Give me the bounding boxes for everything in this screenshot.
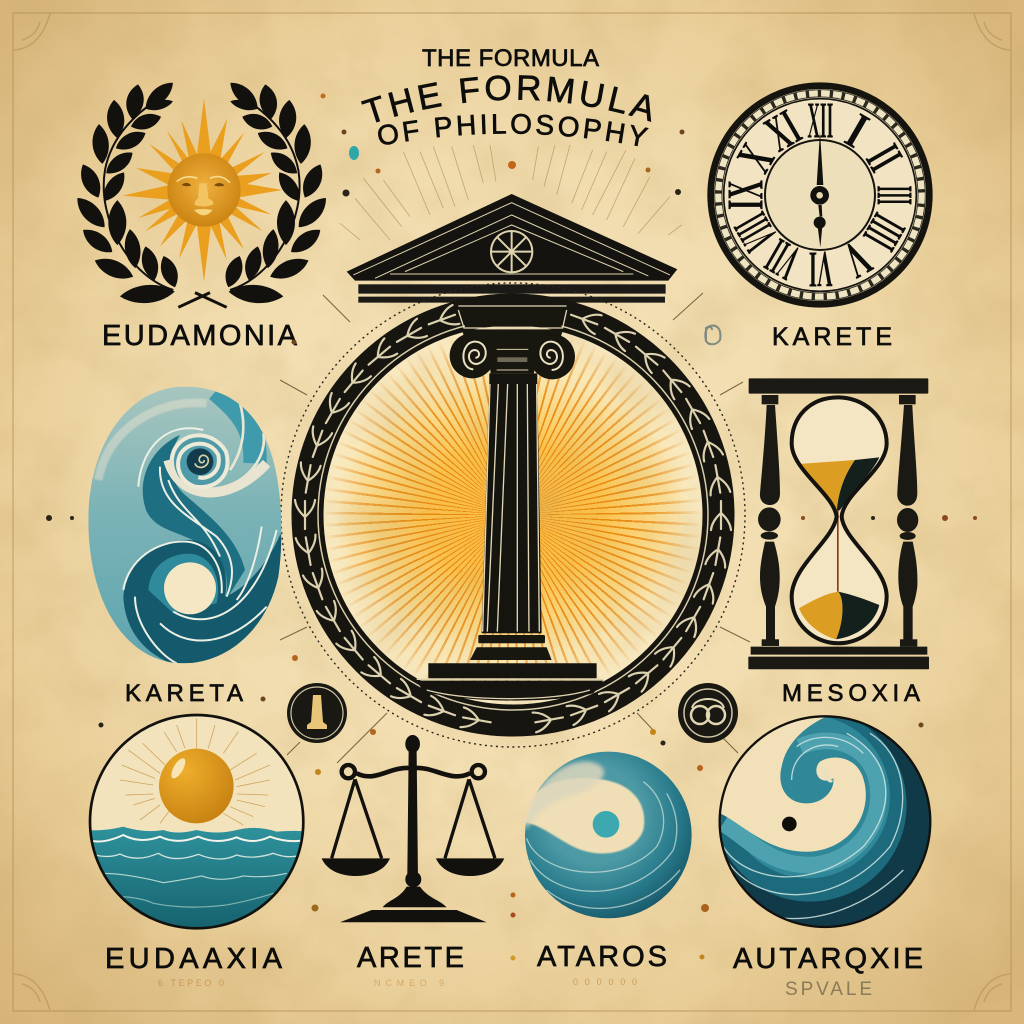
clock numerals: XI [756, 99, 810, 163]
column base [478, 635, 545, 643]
sunburst inside ring [322, 325, 702, 705]
lower spiral band [123, 533, 285, 665]
label: AUTARQXIE: AUTARQXIE [733, 943, 923, 975]
hourglass frame bars [749, 378, 928, 394]
dotted outer orbit [281, 283, 745, 747]
icon: clock [711, 86, 929, 304]
swirl cream interior [520, 778, 644, 853]
swirl centre dot [593, 811, 619, 838]
clock hands [810, 132, 829, 247]
laurel ring [281, 283, 745, 747]
badge: right knot [678, 683, 738, 743]
ionic column [417, 306, 603, 701]
clock numerals: VIII [723, 204, 789, 260]
hourglass upper sand [798, 460, 855, 512]
hourglass left post [758, 395, 781, 646]
scales finial [405, 735, 420, 753]
clock numerals: X [726, 135, 786, 182]
title [361, 45, 652, 146]
label: SPVALE: SPVALE [785, 979, 872, 1000]
clock bead ring [718, 93, 922, 297]
clock numerals: XII [807, 93, 833, 150]
clock numerals: VII [757, 227, 809, 291]
column capital volutes [462, 329, 563, 373]
wave cream interior [717, 715, 866, 852]
label: ARETE: ARETE [357, 942, 464, 974]
small rune mark [705, 326, 720, 344]
label: KARETA: KARETA [125, 680, 243, 707]
dark S-curve [143, 435, 245, 603]
icon: balance scales [322, 735, 504, 922]
wreath [71, 77, 332, 307]
icon: wave circle with dot [713, 708, 930, 927]
scales right pan [445, 779, 495, 858]
oval base [83, 383, 287, 667]
faint captions [158, 977, 637, 988]
sun rays [120, 718, 270, 825]
hourglass falling sand [837, 510, 839, 592]
icon: swirl with dot [520, 752, 692, 918]
icon: laurel wreath with sun face [71, 77, 332, 307]
swirl contour lines [527, 782, 680, 908]
clock numerals: IIII [852, 205, 916, 259]
faint captions: NCMEO 9 [374, 978, 444, 988]
clock numerals [718, 93, 922, 297]
temple wheel emblem [491, 231, 532, 272]
sun face [167, 153, 241, 227]
ring band [308, 310, 718, 720]
wave teal layers [713, 708, 907, 902]
column platform [428, 663, 597, 678]
ring laurel marks [295, 305, 731, 732]
scales post [407, 752, 418, 877]
clock numerals: VI [809, 240, 833, 297]
swirl eye [174, 436, 226, 488]
sun disc panel [90, 715, 303, 928]
icon: wave swirl oval [83, 383, 287, 667]
label: EUDAAXIA: EUDAAXIA [105, 943, 283, 975]
wave centre dot [782, 817, 797, 831]
decorative specks [46, 94, 977, 960]
label: ATAROS: ATAROS [537, 941, 667, 973]
faint captions: 6 TEPEO 0 [158, 978, 224, 988]
clock numerals: III [865, 186, 922, 205]
scales base [383, 887, 447, 907]
scales beam [357, 768, 470, 776]
icon: hourglass [748, 378, 929, 669]
title small line: THE FORMULA [422, 45, 599, 72]
temple pediment [347, 194, 677, 303]
clock numerals: II [855, 136, 913, 180]
sea [92, 826, 302, 927]
swirl highlights [123, 428, 277, 663]
label: MESOXIA: MESOXIA [782, 680, 920, 707]
label: KARETE: KARETE [772, 323, 892, 351]
column abacus [458, 307, 567, 316]
clock numerals: I [836, 103, 878, 159]
clock face [711, 86, 929, 304]
icon: sun over sea [83, 715, 310, 933]
hourglass lower sand [799, 592, 843, 639]
faint captions: 0 0 0 0 0 0 [573, 977, 637, 987]
sun rays [122, 98, 282, 282]
badge: left key [287, 683, 347, 743]
label: EUDAMONIA: EUDAMONIA [102, 320, 298, 352]
clock numerals: IX [718, 180, 775, 210]
title subtitle line: OF PHILOSOPHY [378, 114, 649, 146]
hourglass right post [897, 395, 918, 647]
column shaft [482, 373, 542, 633]
radiating lines above temple [340, 145, 682, 240]
ring inner line [318, 320, 708, 710]
clock inner dial [765, 140, 875, 250]
connector lines [280, 293, 750, 763]
scales left pan [332, 779, 382, 858]
hole in spiral [164, 562, 216, 614]
clock numerals: V [833, 229, 880, 289]
wave highlight lines [723, 733, 903, 919]
title arched line: THE FORMULA [361, 75, 652, 122]
hourglass glass [792, 397, 887, 643]
